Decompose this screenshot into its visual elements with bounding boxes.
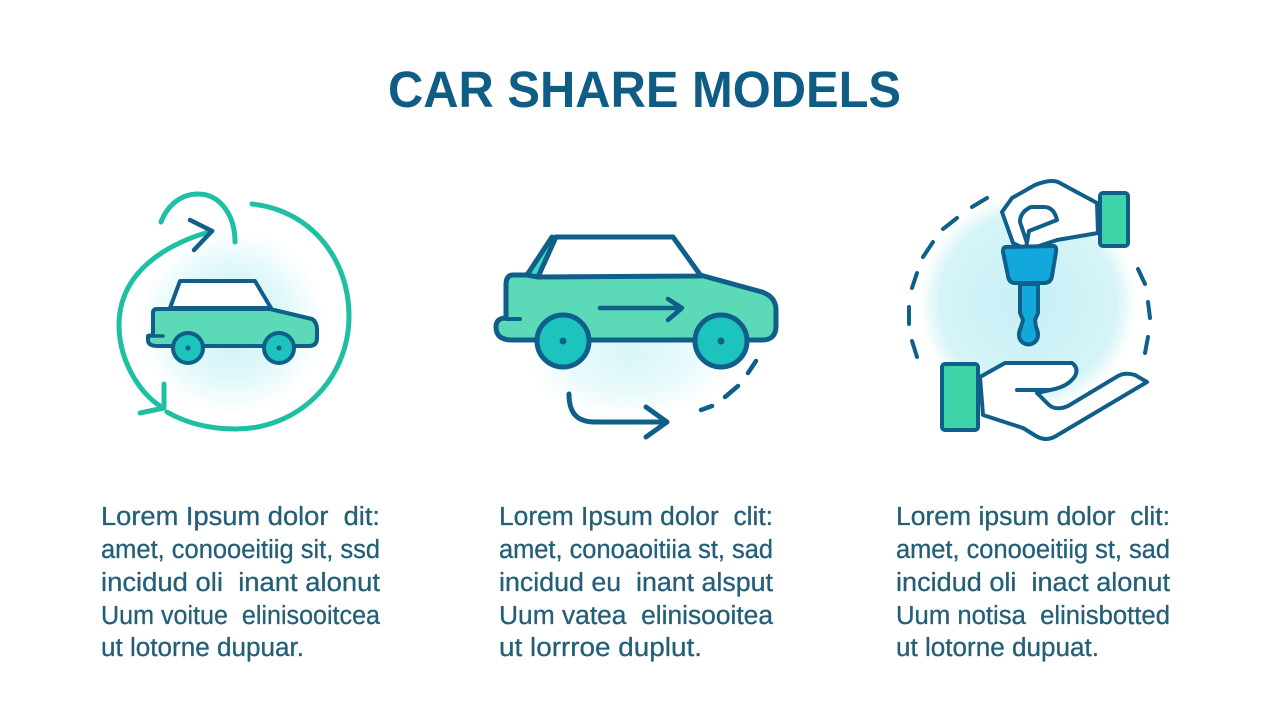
key head [1003,246,1056,283]
lower cuff [942,364,978,430]
text block: column three: amet, conooeitiig st, sad [896,536,1170,564]
car body [148,309,317,346]
door arrow [600,299,682,320]
glow under car [525,293,735,417]
top hook arc [161,194,235,242]
text block: column one: Lorem Ipsum dolor dit: [101,503,380,531]
front wheel [537,315,589,367]
text block: column one [101,503,381,662]
title: CAR SHARE MODELS [388,61,901,118]
text block: column one: Uum voitue elinisooitcea [101,602,381,630]
text block: column two: Uum vatea elinisooitea [499,602,774,630]
lower hand [980,363,1147,439]
curved arrow [569,394,667,437]
icon: key passed between hands [909,181,1150,439]
panel: key handover model [896,181,1170,662]
key shaft [1019,284,1038,344]
text block: column one: incidud oli inant alonut [101,569,380,597]
text block: column two: amet, conoaoitiia st, sad [499,536,773,564]
text block: column one: ut lotorne dupuar. [101,634,304,662]
arrowhead: top [190,220,212,250]
rear wheel [695,315,747,367]
text block: column three: incidud oli inact alonut [896,569,1170,597]
text block: column three: Uum notisa elinisbotted [896,602,1170,630]
arrowhead: bottom [140,384,164,413]
text block: column one: amet, conooeitiig sit, ssd [101,536,380,564]
text block: column three [896,503,1170,662]
circular arrow: right arc [167,204,349,429]
upper hand [1002,181,1098,250]
rear wheel [264,333,294,363]
text block: column three: ut lotorne dupuat. [896,634,1099,662]
glow circle [920,195,1136,411]
car window [170,281,271,308]
text block: column two: incidud eu inant alsput [499,569,773,597]
icon: car in circular arrows [119,194,349,429]
lower hand finger line [1017,388,1050,392]
dashed path [701,361,756,410]
car bumper line [149,334,163,338]
glow behind car [140,230,324,414]
icon: car with direction arrows [496,237,776,437]
text block: column two: ut lorrroe duplut. [499,634,702,662]
text block: column three: Lorem ipsum dolor clit: [896,503,1170,531]
upper hand thumb [1020,207,1057,248]
car windscreen wedge [527,237,556,277]
car body [496,275,776,340]
dashed ring [909,198,1150,357]
circular arrow: left arc [119,231,212,408]
bumper line [506,317,520,321]
upper cuff [1100,193,1128,246]
front wheel [173,333,203,363]
panel: round-trip model [101,194,381,662]
text block: column two: Lorem Ipsum dolor clit: [499,503,773,531]
car window [538,237,701,277]
panel: one-way model [496,237,776,662]
text block: column two [499,503,774,662]
